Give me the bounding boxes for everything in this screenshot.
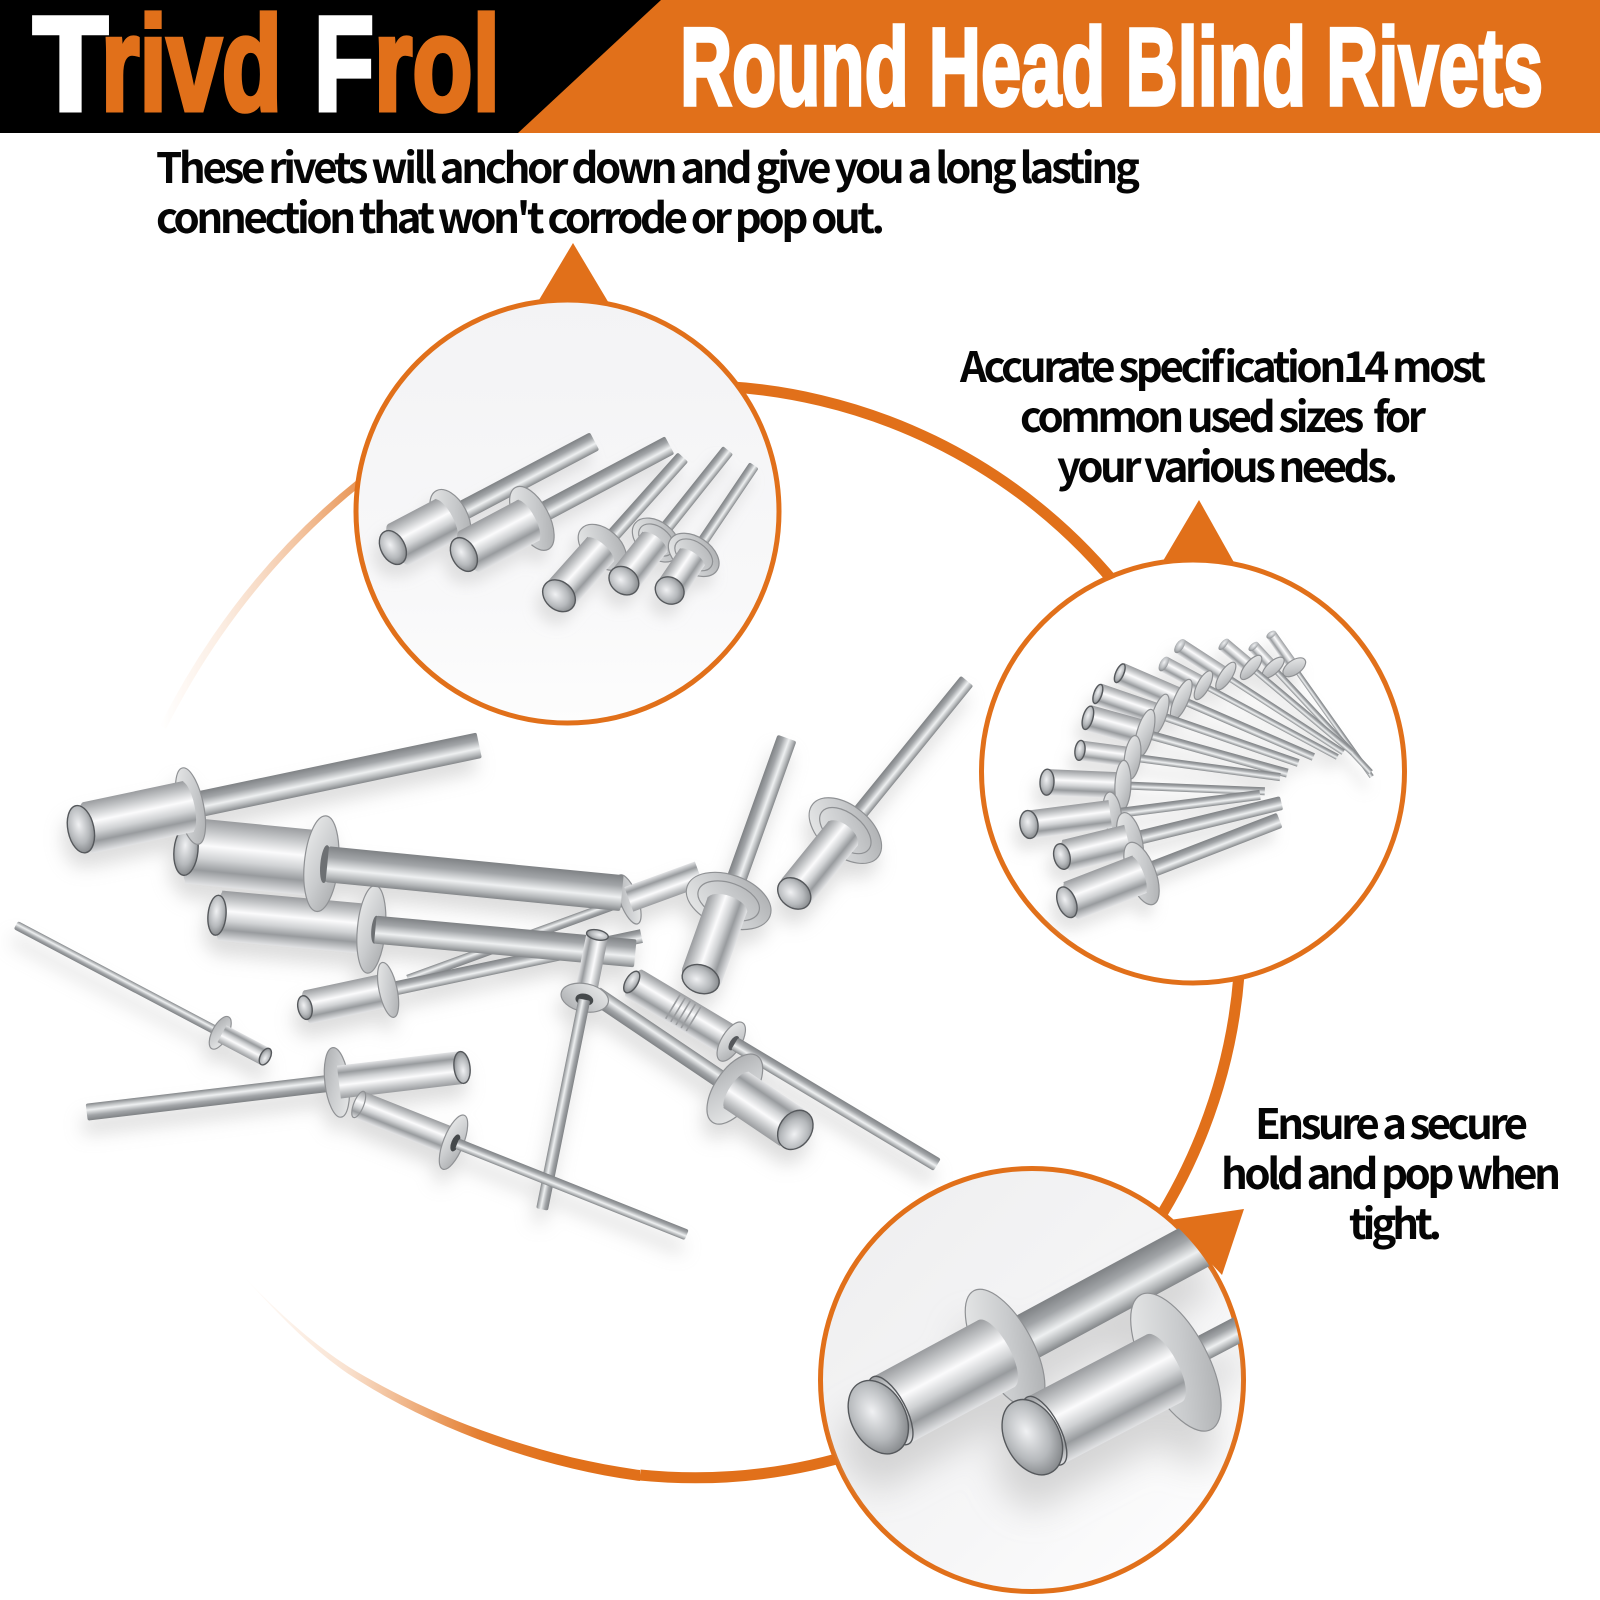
close-up rivets in bottom circle	[826, 1228, 1243, 1518]
callout text: sizes: your various needs.	[1057, 434, 1398, 495]
callout text: anchor	[156, 135, 1140, 246]
callout text: secure hold	[1221, 1091, 1561, 1252]
rivet group in top circle	[371, 433, 758, 626]
callout pointer: top circle	[536, 243, 610, 305]
rivet fan in right circle	[1017, 625, 1382, 936]
detail circle: close-up rivets	[820, 1168, 1278, 1592]
rivet 6	[655, 723, 828, 1007]
brand name	[33, 0, 500, 139]
rivet 2	[169, 801, 627, 941]
rivet 12	[83, 1032, 474, 1147]
rivet 8	[519, 925, 622, 1214]
callout text: sizes: Accurate specification14 most	[959, 334, 1486, 395]
callout text: secure hold: hold and pop when	[1221, 1141, 1561, 1202]
callout text: sizes: common used sizes for	[1020, 384, 1427, 445]
rivet 9	[615, 960, 948, 1184]
rivet 10	[573, 962, 831, 1172]
callout text: sizes	[959, 334, 1486, 495]
main rivets photo	[7, 654, 1000, 1262]
callout pointer: right circle	[1160, 500, 1236, 566]
rivet 4	[292, 909, 647, 1036]
header banner	[0, 0, 1600, 139]
callout text: anchor: connection that won't corrode or pop out.	[156, 185, 885, 246]
rivet 3	[204, 871, 639, 997]
rivet 13	[343, 1076, 697, 1262]
rivet 5	[399, 849, 708, 1004]
rivet 11	[7, 909, 278, 1075]
callout pointer: bottom circle	[1170, 1209, 1244, 1275]
rivet 7	[753, 654, 1000, 931]
background ring arc	[163, 386, 1241, 1481]
callout text: anchor: These rivets will anchor down and give you a long lasting	[156, 135, 1140, 196]
callout text: secure hold: Ensure a secure	[1255, 1091, 1528, 1152]
detail circle: assorted rivets	[356, 300, 779, 723]
detail circle: size assortment	[982, 560, 1404, 983]
callout text: secure hold: tight.	[1349, 1191, 1442, 1252]
rivet 1	[60, 707, 487, 870]
